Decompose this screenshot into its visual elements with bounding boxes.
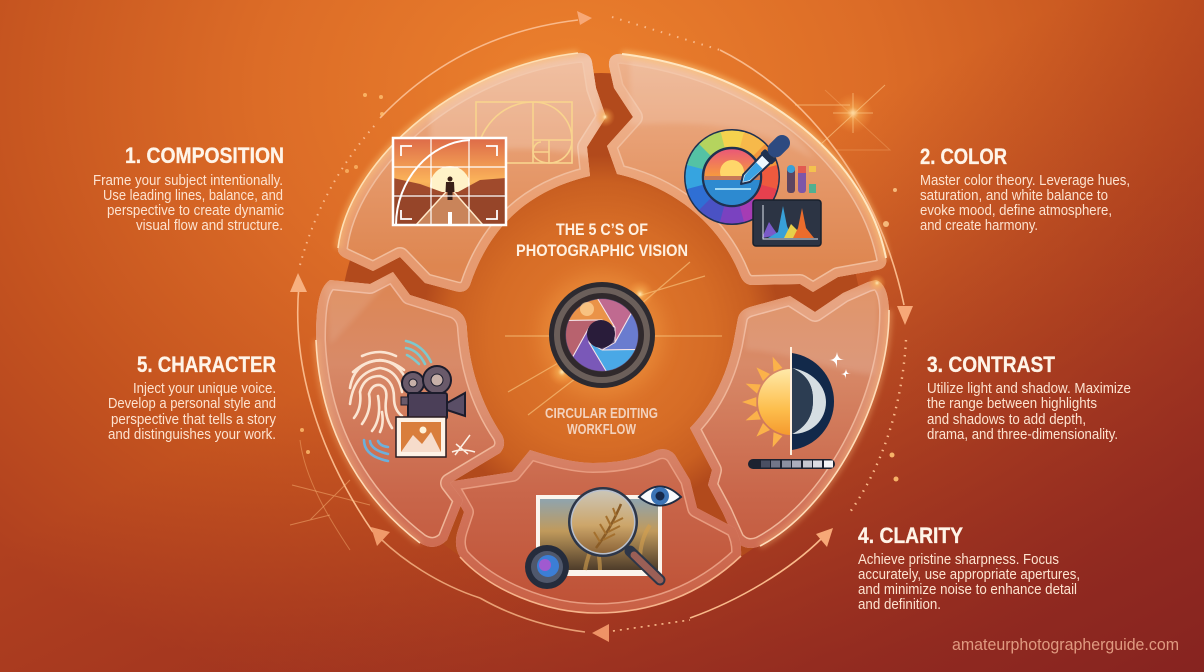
icon: magnifier over photo <box>525 486 681 589</box>
text block: composition: perspective to create dynamic <box>107 202 284 219</box>
panel: contrast <box>690 280 889 548</box>
golden spiral grid <box>476 102 572 163</box>
small lens <box>525 545 569 589</box>
text block: color <box>920 144 1130 234</box>
center title: PHOTOGRAPHIC VISION <box>516 241 688 260</box>
text block: contrast: the range between highlights <box>927 395 1097 412</box>
text block: contrast: 3. CONTRAST <box>927 352 1055 377</box>
icon: color wheel and histogram <box>679 124 821 246</box>
panel: character <box>316 272 504 547</box>
text block: color: saturation, and white balance to <box>920 187 1108 204</box>
dark ring behind panels <box>339 73 863 597</box>
text block: color: 2. COLOR <box>920 144 1007 169</box>
text block: contrast: and shadows to add depth, <box>927 411 1086 428</box>
text block: clarity: 4. CLARITY <box>858 523 963 548</box>
panel: color <box>607 54 886 292</box>
aperture blades <box>566 299 638 371</box>
text block: clarity: Achieve pristine sharpness. Focus <box>858 551 1059 568</box>
text block: clarity: accurately, use appropriate apertures, <box>858 566 1080 583</box>
text block: character: perspective that tells a story <box>111 411 276 428</box>
text block: clarity: and minimize noise to enhance detail <box>858 581 1077 598</box>
central hub disc <box>421 155 781 515</box>
text block: character: Develop a personal style and <box>108 395 276 412</box>
watermark: amateurphotographerguide.com <box>952 635 1179 654</box>
text block: character <box>108 352 276 443</box>
center subtitle: WORKFLOW <box>567 421 637 438</box>
signal waves <box>364 341 431 461</box>
text block: character: 5. CHARACTER <box>137 352 276 377</box>
camera lens emblem <box>505 262 722 415</box>
text block: clarity <box>858 523 1080 613</box>
text block: composition <box>93 143 284 234</box>
text block: character: Inject your unique voice. <box>133 380 276 397</box>
fingerprint <box>350 352 408 432</box>
signature mark <box>452 435 475 455</box>
eyedropper <box>735 132 793 190</box>
text block: clarity: and definition. <box>858 596 941 613</box>
text block: color: Master color theory. Leverage hues, <box>920 172 1130 189</box>
picture card <box>396 417 446 457</box>
center title: THE 5 C’S OF <box>556 220 648 239</box>
center title <box>516 220 688 260</box>
text block: contrast: Utilize light and shadow. Maximize <box>927 380 1131 397</box>
panel: composition <box>338 53 606 292</box>
text block: contrast: drama, and three-dimensionality. <box>927 426 1118 443</box>
text block: color: evoke mood, define atmosphere, <box>920 202 1112 219</box>
text block: composition: 1. COMPOSITION <box>125 143 284 168</box>
text block: character: and distinguishes your work. <box>108 426 276 443</box>
swatches <box>787 165 816 193</box>
icon: sun and moon contrast <box>742 347 851 469</box>
text block: composition: Use leading lines, balance, and <box>103 187 283 204</box>
histogram card <box>753 200 821 246</box>
movie camera <box>401 366 465 419</box>
text block: composition: visual flow and structure. <box>136 217 283 234</box>
text block: color: and create harmony. <box>920 217 1038 234</box>
eye <box>639 486 681 506</box>
rule of thirds photo <box>393 138 506 225</box>
panel: clarity <box>447 449 741 613</box>
center subtitle: CIRCULAR EDITING <box>545 405 658 422</box>
tonal scale bar <box>748 459 835 469</box>
icon: fingerprint, camera and picture <box>350 341 475 461</box>
sparkles and light flares <box>290 85 898 550</box>
center subtitle <box>545 405 658 438</box>
text block: contrast <box>927 352 1131 443</box>
cycle arrows <box>290 11 913 642</box>
text block: composition: Frame your subject intentionally. <box>93 172 283 189</box>
icon: composition frames <box>393 102 572 225</box>
